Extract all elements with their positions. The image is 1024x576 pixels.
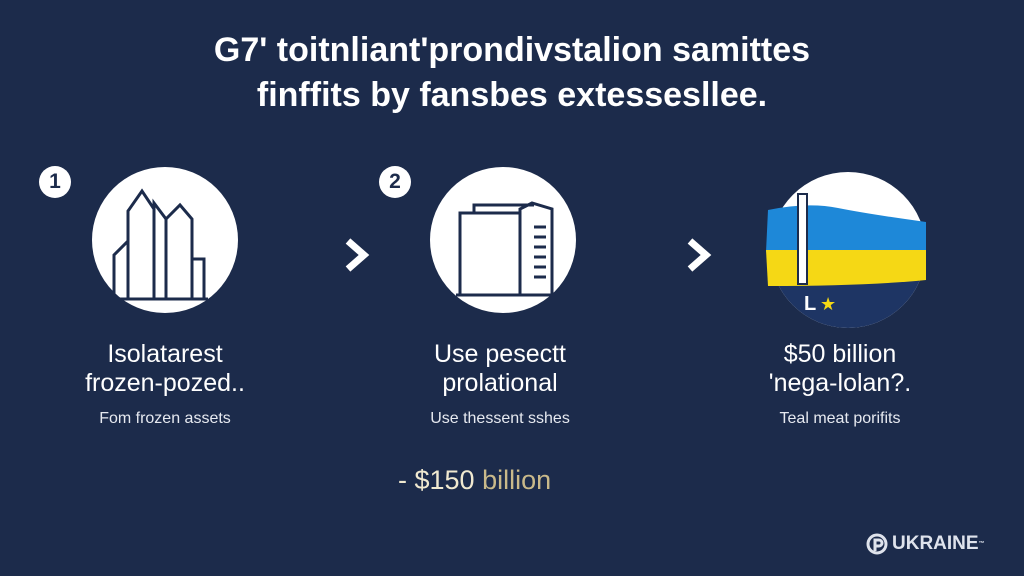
icon: buildings: [92, 167, 238, 313]
icon: office building: [430, 167, 576, 313]
text: step 3: [769, 340, 911, 427]
text: step 1: Fom frozen assets: [99, 410, 231, 427]
text: step 1: frozen-pozed..: [85, 369, 245, 397]
step 2 badge: 2: [389, 170, 401, 193]
logo: Ukraine: ™: [979, 541, 985, 547]
step 2 badge: [379, 166, 411, 198]
icon: Ukraine flag: [766, 172, 926, 328]
text: step 2: prolational: [442, 369, 558, 397]
icon: Ukraine flag: ★: [820, 294, 836, 314]
text: step 2: Use thessent sshes: [430, 410, 570, 427]
chevron 2: [688, 238, 712, 272]
chevron 1: [346, 238, 370, 272]
title: [214, 31, 810, 114]
total amount: - $150 billion: [398, 465, 551, 495]
text: step 1: [85, 340, 245, 427]
step 1 badge: 1: [49, 170, 61, 193]
text: step 3: Teal meat porifits: [780, 410, 900, 427]
text: step 1: Isolatarest: [107, 340, 223, 368]
text: step 2: Use pesectt: [434, 340, 566, 368]
text: step 3: 'nega-lolan?.: [769, 369, 911, 397]
text: step 3: $50 billion: [784, 340, 896, 368]
icon: Ukraine flag: L: [804, 293, 816, 315]
title: finffits by fansbes extessesllee.: [257, 76, 767, 114]
logo: Ukraine: UKRAINE: [892, 533, 979, 554]
title: G7' toitnliant'prondivstalion samittes: [214, 31, 810, 69]
text: step 2: [430, 340, 570, 427]
step 1 badge: [39, 166, 71, 198]
